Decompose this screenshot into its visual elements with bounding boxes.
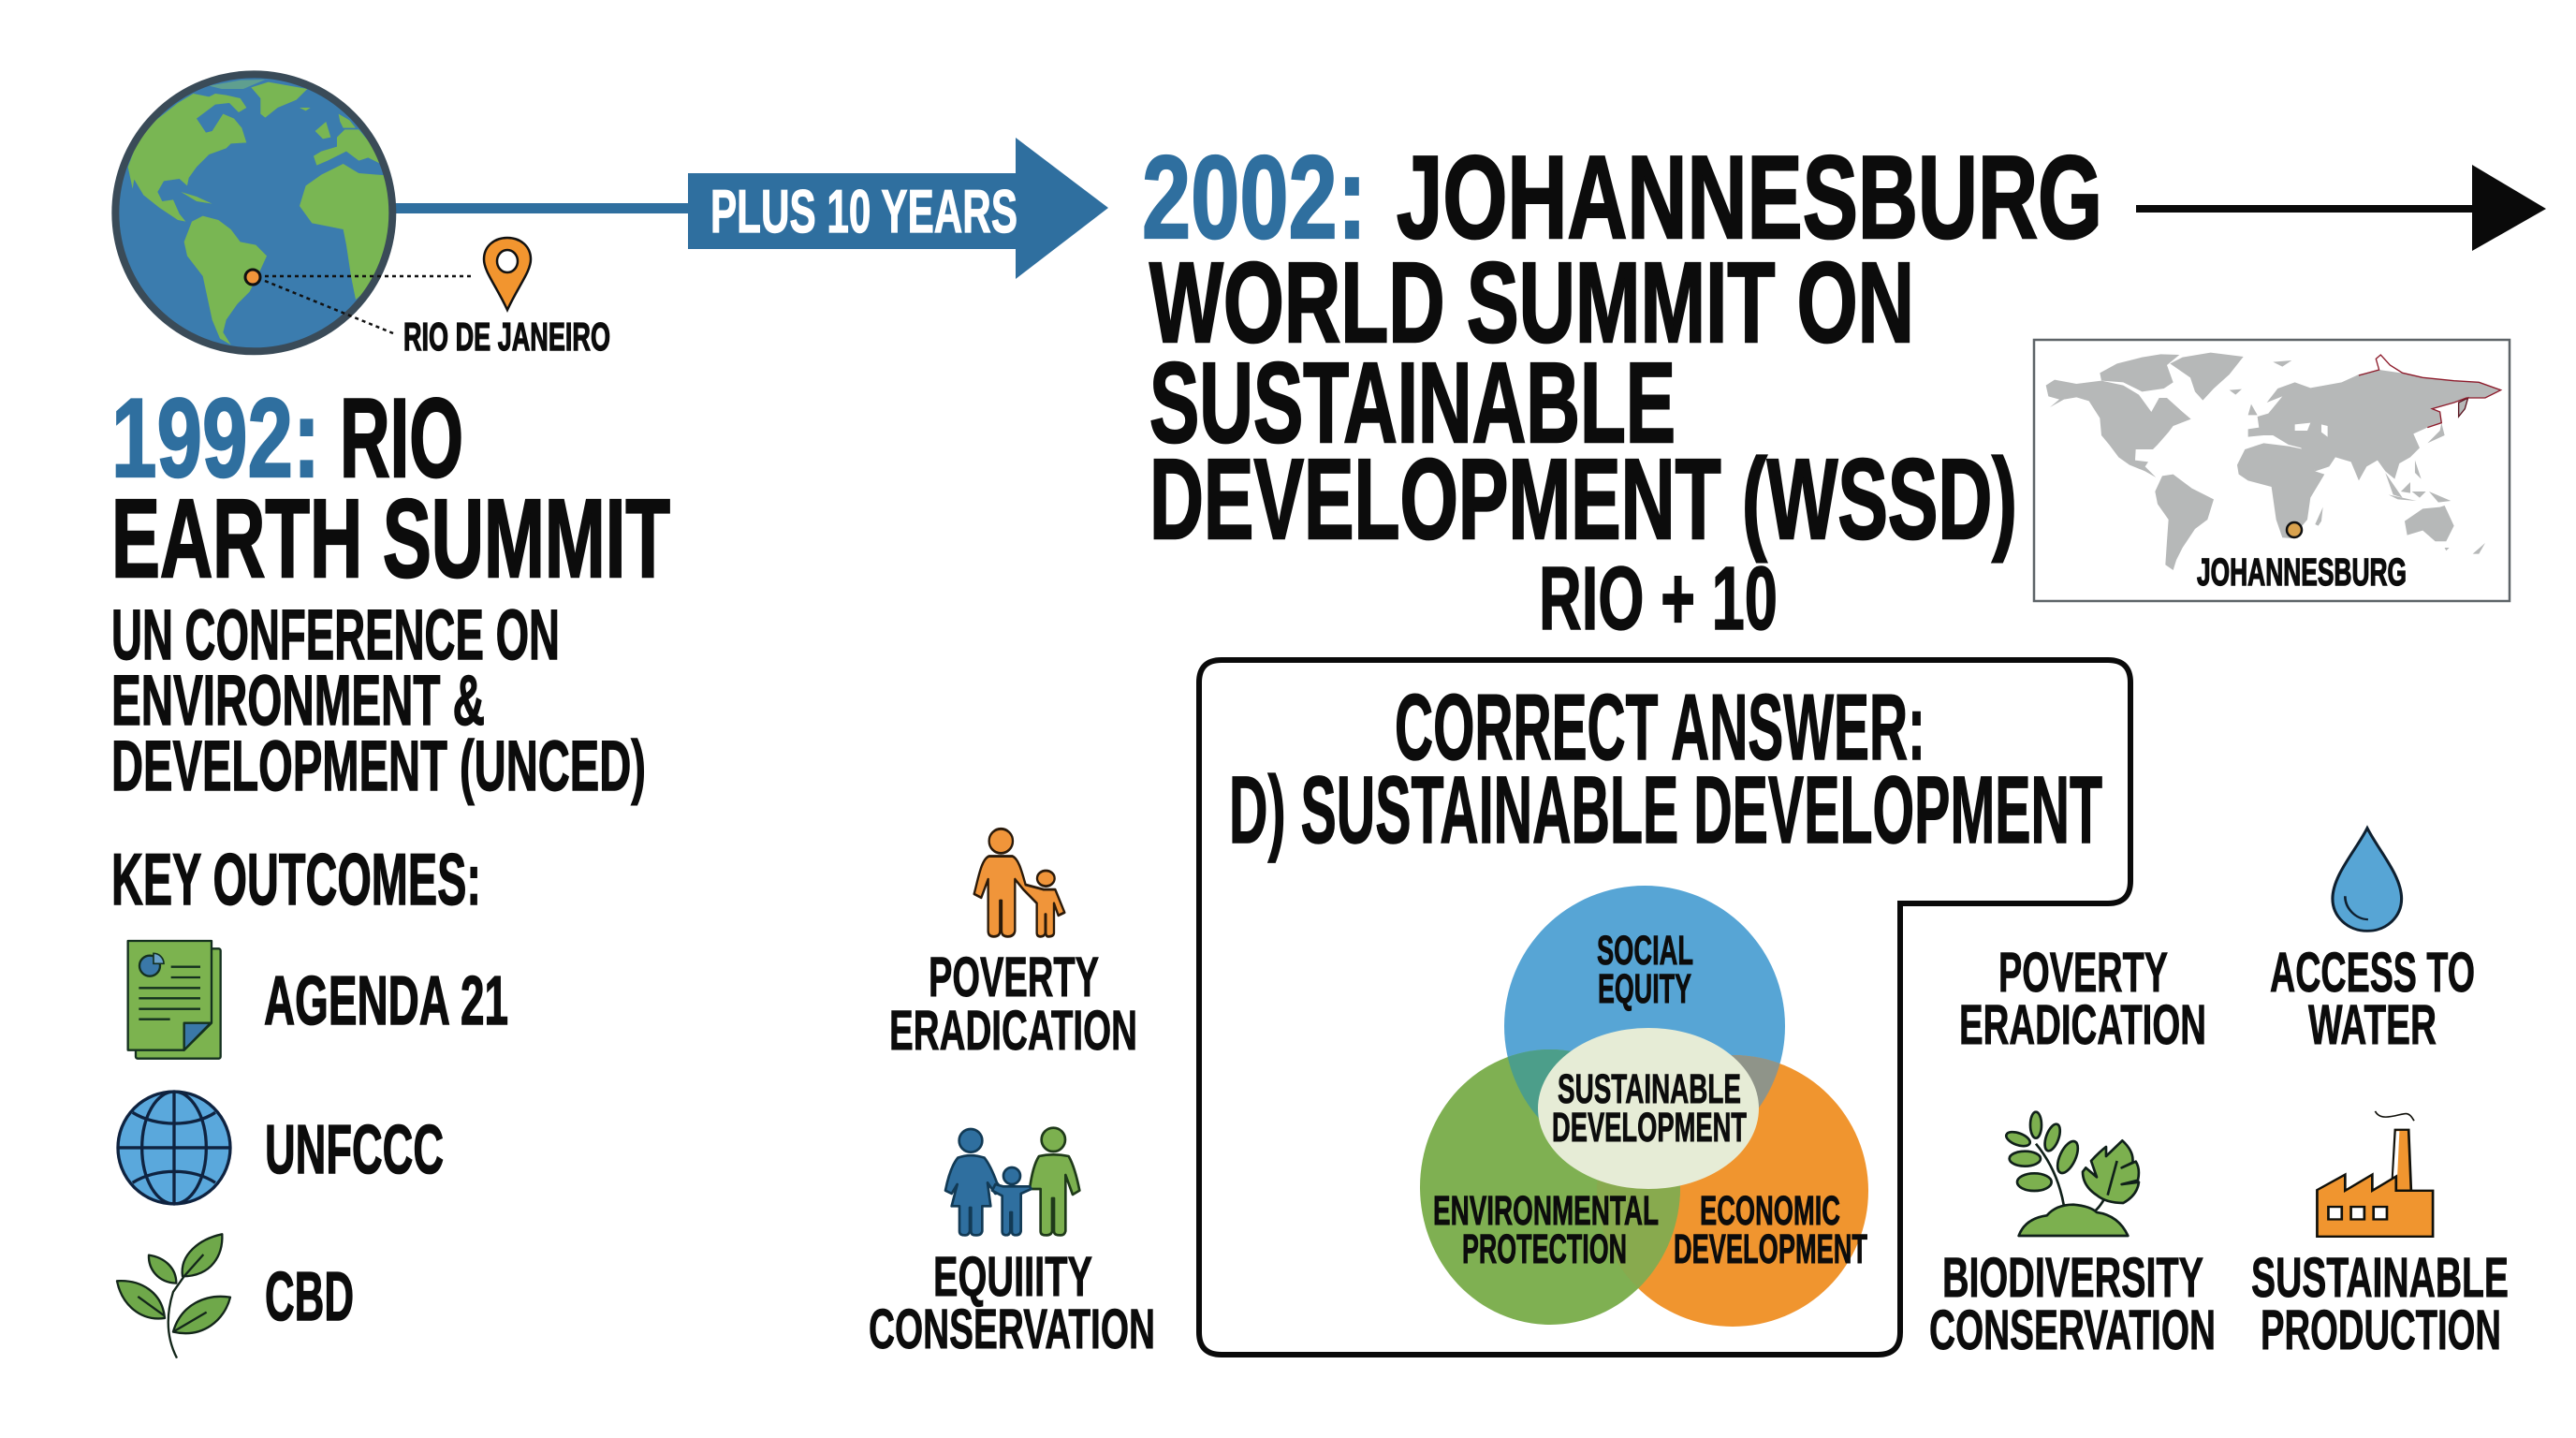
icon: water drop <box>2333 829 2402 931</box>
heading: 1992 Rio: RIO <box>340 375 463 501</box>
icon: CBD plant <box>117 1234 230 1358</box>
chart: venn diagram of sustainable development <box>1420 886 1868 1327</box>
label: sustainable development: SUSTAINABLE <box>1558 1066 1741 1112</box>
label: social equity: SOCIAL <box>1597 928 1693 974</box>
label: economic development: ECONOMIC <box>1700 1188 1840 1234</box>
heading: correct answer: CORRECT ANSWER: <box>1395 675 1925 780</box>
label: economic development <box>1674 1188 1867 1272</box>
label: social equity: EQUITY <box>1598 966 1691 1012</box>
icon: adult and child <box>974 829 1064 936</box>
heading: World Summit on Sustainable Development: DEVELOPMENT (WSSD) <box>1149 435 2017 563</box>
panel: world map: JOHANNESBURG <box>2197 550 2407 594</box>
label: economic development: DEVELOPMENT <box>1674 1226 1867 1272</box>
arrow: plus 10 years: PLUS 10 YEARS <box>710 177 1017 245</box>
heading: correct answer <box>1229 675 2102 863</box>
panel: world map <box>2034 340 2510 601</box>
text block: UN conference: ENVIRONMENT & <box>111 661 485 741</box>
label: biodiversity conservation <box>1929 1246 2216 1361</box>
subheading: Rio + 10: RIO + 10 <box>1539 549 1778 649</box>
label: Agenda 21: AGENDA 21 <box>264 961 508 1039</box>
label: equity conservation: EQUIIITY <box>933 1245 1092 1308</box>
label: social equity <box>1597 928 1693 1012</box>
label: equity conservation: CONSERVATION <box>869 1298 1155 1360</box>
label: environmental protection <box>1433 1188 1659 1272</box>
label: poverty eradication right <box>1959 941 2206 1056</box>
label: poverty eradication left: POVERTY <box>929 946 1099 1008</box>
label: poverty eradication right: POVERTY <box>1998 941 2168 1004</box>
label: environmental protection: PROTECTION <box>1462 1226 1627 1272</box>
heading: 2002 Johannesburg: JOHANNESBURG <box>1397 131 2102 263</box>
text block: UN conference <box>111 595 646 806</box>
icon: Agenda 21 document <box>128 941 221 1059</box>
label: access to water <box>2270 941 2475 1056</box>
heading: World Summit on Sustainable Development <box>1149 239 2017 563</box>
icon: UNFCCC globe <box>118 1092 230 1204</box>
heading: World Summit on Sustainable Development: WORLD SUMMIT ON <box>1149 239 1914 366</box>
heading: key outcomes: KEY OUTCOMES: <box>111 838 481 920</box>
heading: 2002 Johannesburg <box>1142 131 2102 263</box>
label: environmental protection: ENVIRONMENTAL <box>1433 1188 1659 1234</box>
label: Rio de Janeiro: RIO DE JANEIRO <box>403 315 610 359</box>
label: sustainable development: DEVELOPMENT <box>1552 1105 1747 1151</box>
arrow: plus 10 years <box>688 138 1108 279</box>
heading: 2002 Johannesburg: 2002: <box>1142 131 1367 263</box>
text block: UN conference: UN CONFERENCE ON <box>111 595 560 675</box>
label: sustainable production <box>2251 1246 2509 1361</box>
location marker: Rio on globe with leader lines <box>245 270 473 333</box>
label: equity conservation <box>869 1245 1155 1360</box>
connector bar: globe to arrow <box>393 203 693 213</box>
icon: earth globe <box>115 74 402 352</box>
arrow: black timeline arrow <box>2136 165 2546 251</box>
heading: World Summit on Sustainable Development: SUSTAINABLE <box>1149 339 1676 466</box>
label: sustainable development <box>1552 1066 1747 1151</box>
label: poverty eradication right: ERADICATION <box>1959 993 2206 1056</box>
panel: correct answer outline <box>1199 660 2130 1355</box>
label: CBD: CBD <box>265 1257 354 1335</box>
label: poverty eradication left <box>889 946 1137 1062</box>
label: poverty eradication left: ERADICATION <box>889 999 1137 1062</box>
icon: map pin <box>484 238 531 310</box>
heading: Earth Summit: EARTH SUMMIT <box>111 477 670 601</box>
label: UNFCCC: UNFCCC <box>265 1110 444 1188</box>
icon: factory <box>2317 1111 2433 1237</box>
text block: UN conference: DEVELOPMENT (UNCED) <box>111 726 646 806</box>
label: access to water: WATER <box>2308 993 2437 1056</box>
heading: 1992 Rio: 1992: <box>111 375 320 501</box>
icon: biodiversity plants <box>2004 1112 2139 1236</box>
icon: family <box>945 1128 1079 1235</box>
label: biodiversity conservation: CONSERVATION <box>1929 1299 2216 1361</box>
label: biodiversity conservation: BIODIVERSITY <box>1942 1246 2203 1309</box>
